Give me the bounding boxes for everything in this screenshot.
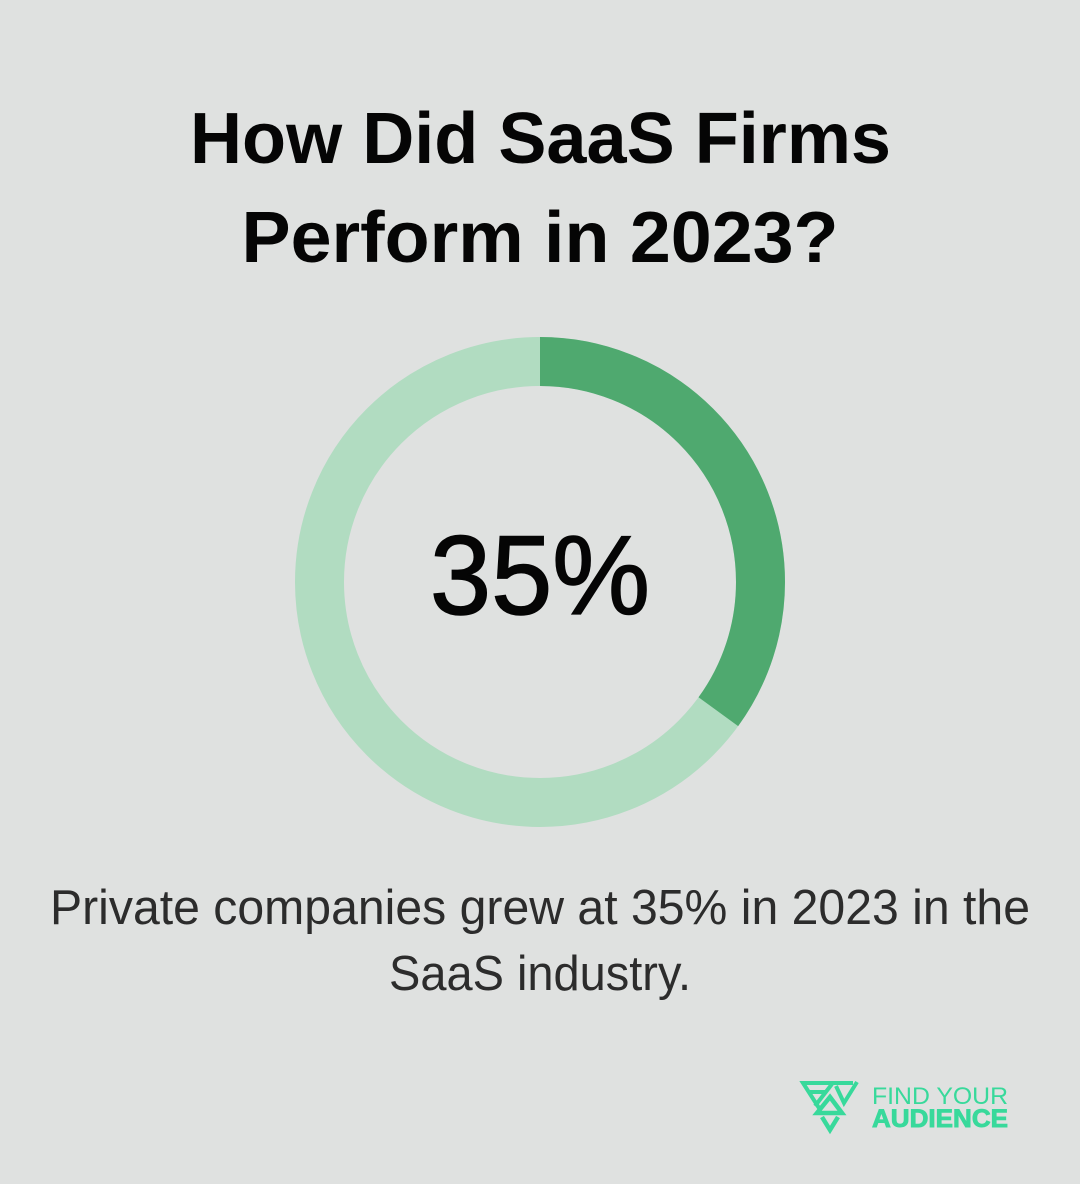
title: Perform in 2023? xyxy=(242,198,838,278)
donut chart: 35% xyxy=(320,362,760,802)
logo wordmark xyxy=(872,1083,1008,1133)
logo wordmark: FIND YOUR xyxy=(872,1083,1008,1110)
logo wordmark: AUDIENCE xyxy=(872,1105,1008,1133)
logo: Find Your Audience xyxy=(803,1082,1008,1133)
title xyxy=(190,99,891,278)
title: How Did SaaS Firms xyxy=(190,99,891,179)
logo icon xyxy=(803,1082,857,1130)
description text xyxy=(50,881,1030,1001)
donut centre value: 35% xyxy=(430,513,650,638)
description text: SaaS industry. xyxy=(389,947,691,1001)
description text: Private companies grew at 35% in 2023 in the xyxy=(50,881,1030,935)
